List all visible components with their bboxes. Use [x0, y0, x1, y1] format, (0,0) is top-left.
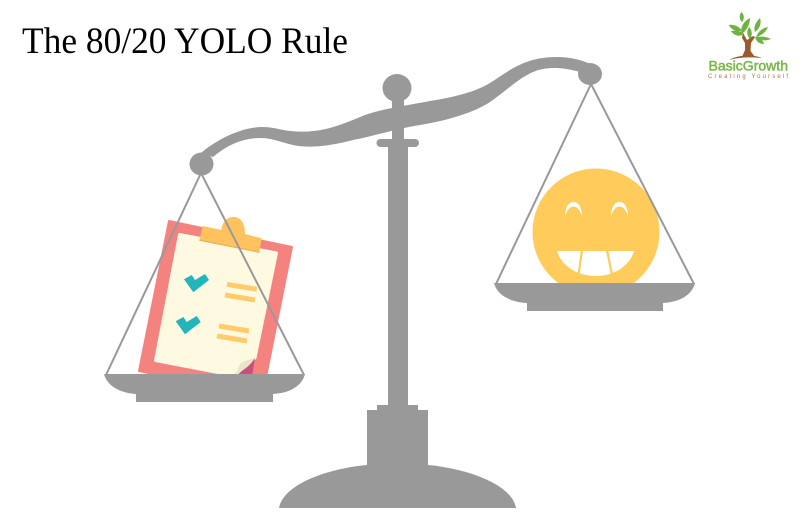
- icon: tree trunk: [742, 33, 755, 57]
- face: [532, 168, 660, 296]
- logo tagline: Creating Yourself: [708, 74, 788, 80]
- check mark 1: [184, 274, 209, 292]
- clip: [199, 217, 262, 253]
- collar: [376, 139, 419, 147]
- text lines: [217, 284, 257, 341]
- clipboard board: [139, 221, 292, 397]
- logo name: BasicGrowth: [708, 58, 788, 74]
- right pan: [494, 283, 695, 311]
- logo: Basic Growth: [708, 12, 788, 80]
- eye right: [611, 202, 628, 216]
- check mark 2: [176, 316, 201, 334]
- base dome: [279, 465, 516, 508]
- clipboard: [139, 217, 292, 397]
- title: The 80/20 YOLO Rule: [22, 21, 348, 62]
- right strings: [496, 84, 694, 284]
- scale: [190, 57, 602, 508]
- right knob: [578, 63, 602, 85]
- icon: ground: [729, 56, 762, 60]
- teeth: [557, 251, 634, 276]
- eye left: [565, 202, 582, 216]
- left pan: [104, 374, 305, 402]
- left knob: [190, 152, 214, 176]
- beam: [201, 57, 590, 157]
- left strings: [106, 173, 304, 375]
- smiley face: [532, 168, 660, 296]
- page curl: [236, 358, 255, 376]
- icon: tree leaves: [729, 12, 771, 44]
- upper column: [392, 98, 404, 140]
- pedestal: [367, 147, 428, 466]
- clipboard paper: [156, 234, 276, 376]
- finial ball: [382, 74, 412, 102]
